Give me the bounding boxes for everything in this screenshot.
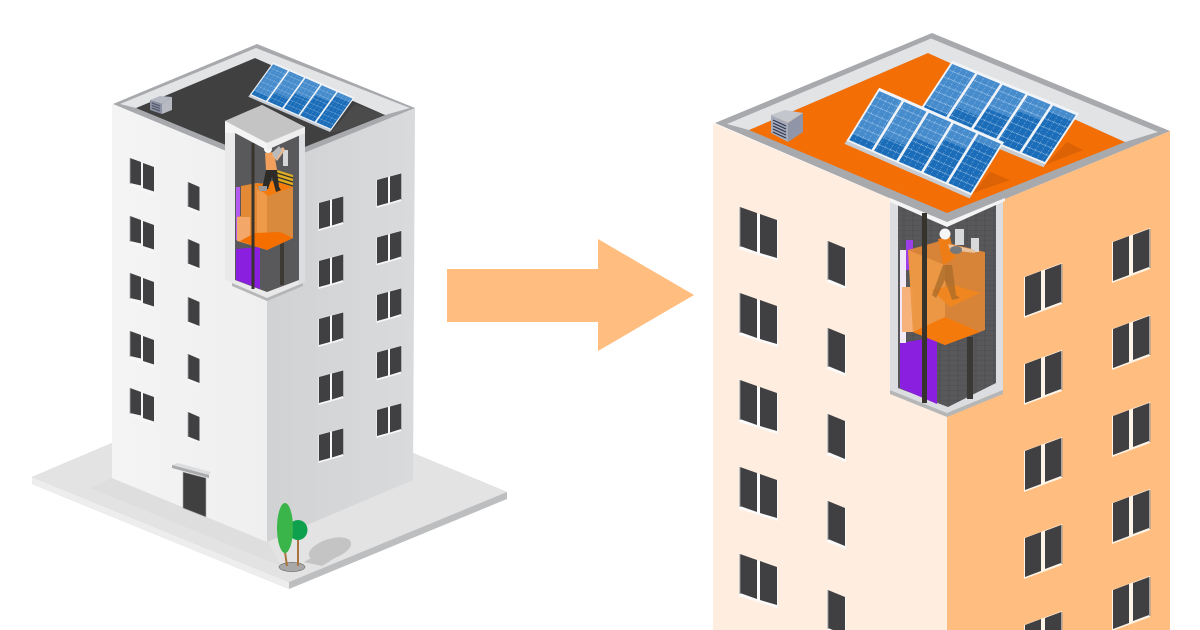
tree [277,503,354,572]
windows: left facade [739,207,846,630]
solar panels: front row [845,88,1004,198]
wall: right facade [267,108,415,542]
arrow [447,239,694,351]
building before renovation [32,44,507,589]
solar panels [248,62,355,132]
wall: left facade [713,123,947,630]
lift car: purple door [236,187,260,289]
windows: right facade [318,173,402,463]
windows: right facade [1024,228,1150,630]
solar panels: back row [917,61,1079,167]
wall: left facade [112,104,267,542]
roof [715,33,1170,223]
icon: air conditioning unit [150,96,172,114]
roof [113,44,415,168]
lift shaft [225,105,305,301]
lift car: orange cabin [237,180,293,250]
lift shaft [890,198,1005,417]
lift car: orange cabin [908,241,985,345]
lift car: purple door [900,240,937,404]
building after renovation [713,33,1170,630]
ground slab [32,443,507,589]
windows: left facade [130,158,200,443]
worker on lift car [932,228,979,300]
shaft cap [225,105,305,150]
yellow safety railing [277,170,293,187]
wall: right facade [947,131,1170,630]
worker on lift car [258,145,285,192]
entrance door [172,463,211,517]
icon: air conditioning unit [771,110,803,142]
